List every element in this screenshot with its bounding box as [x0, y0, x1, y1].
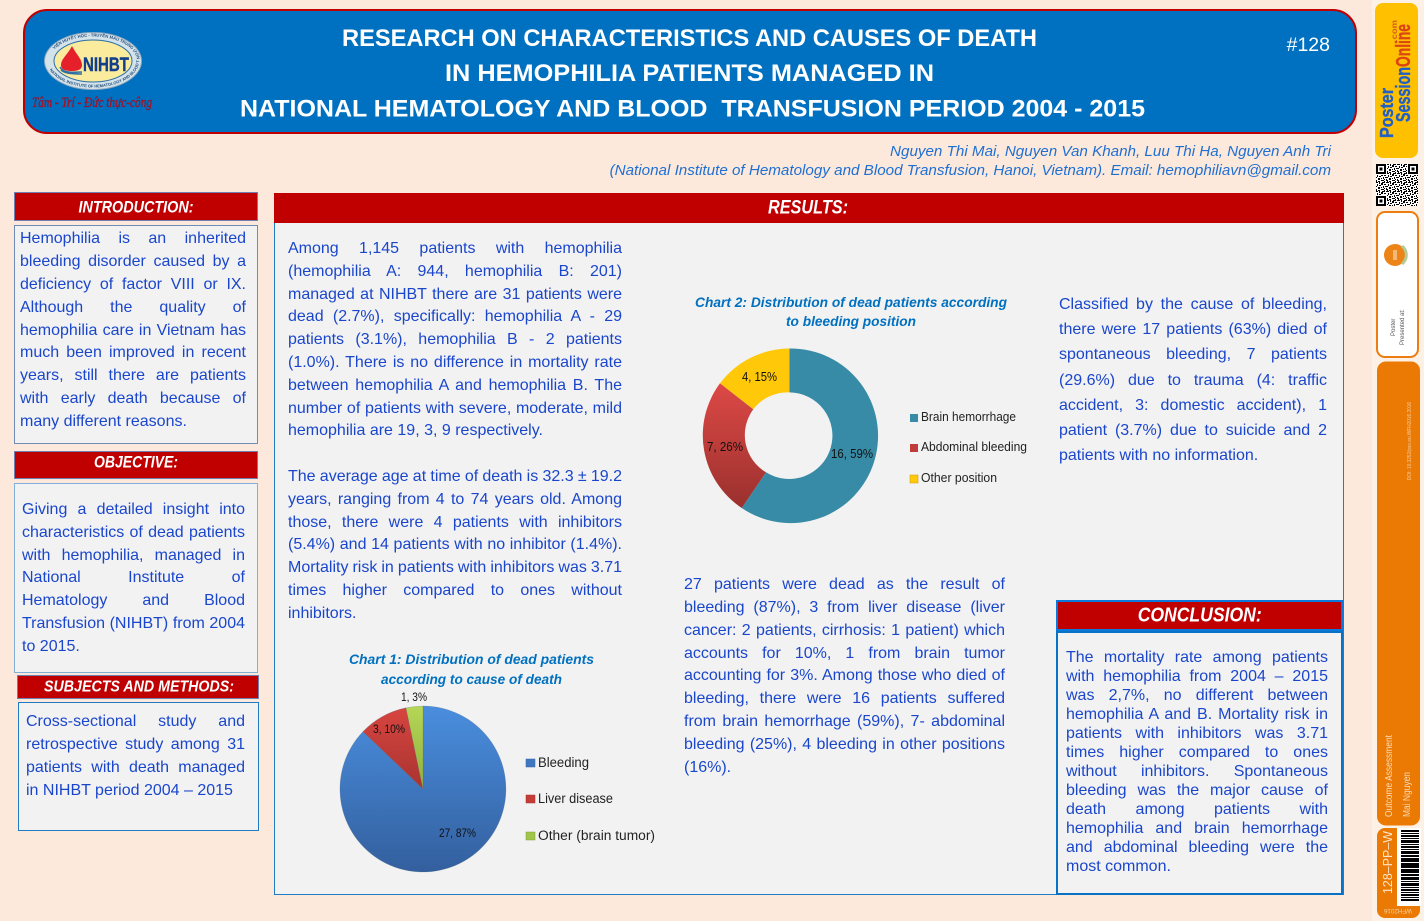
- text: introduction: Although the quality of: [20, 299, 246, 316]
- text: results column 1: between hemophilia A and hemophilia B. The: [288, 377, 622, 394]
- icon: congress logo: [1384, 244, 1406, 266]
- text: results column 3: there were 17 patients (63%) died of: [1059, 321, 1327, 338]
- sidebar: orange info bar: Mai Nguyen: [1402, 772, 1413, 817]
- donut legend: Brain hemorrhage: [921, 409, 1016, 424]
- text: subjects and methods: [26, 713, 245, 799]
- heading: results: [274, 193, 1344, 223]
- text: conclusion: hemophilia A and B. Mortality risk in: [1066, 706, 1328, 723]
- title: [240, 25, 1145, 122]
- text: conclusion: death among patients with: [1066, 801, 1328, 818]
- text: introduction: with early death because of: [20, 390, 246, 407]
- text: results column 2: bleeding (25%), 4 bleeding in other positions: [684, 736, 1005, 753]
- text: introduction: bleeding disorder caused by a: [20, 253, 246, 270]
- heading: objective: [14, 451, 258, 479]
- text: objective: with hemophilia, managed in: [22, 547, 245, 564]
- icon: NIHBT logo: NIHBT: [83, 55, 129, 76]
- text: subjects and methods: patients with death managed: [26, 759, 245, 776]
- heading: introduction: [14, 192, 258, 221]
- text: results column 1: years, ranging from 4 to 74 years old. Among: [288, 491, 622, 508]
- pie legend: Bleeding: [538, 755, 589, 770]
- icon: QR code: [1376, 164, 1418, 206]
- text: introduction: hemophilia care in Vietnam has: [20, 322, 246, 339]
- sidebar: presented at card: Presented at:: [1400, 309, 1406, 345]
- panel: objective: [14, 483, 258, 673]
- pie data labels: [373, 692, 476, 840]
- text: results column 1: number of patients with severe, moderate, mild: [288, 400, 622, 417]
- text: conclusion: bleeding was the major cause of: [1066, 782, 1328, 799]
- icon: NIHBT logo: Tâm - Trí - Đức thực-công: [32, 95, 152, 111]
- text: results column 2: accounts for 10%, 1 from brain tumor: [684, 645, 1005, 662]
- text: results column 1: dead (2.7%), specifically: hemophilia A - 29: [288, 308, 622, 325]
- icon: barcode: [1401, 830, 1419, 901]
- text: subjects and methods: retrospective study among 31: [26, 736, 245, 753]
- chart 1 title: [349, 651, 594, 687]
- panel: conclusion: [1056, 631, 1343, 895]
- text: results column 2: [684, 576, 1005, 776]
- donut legend: [910, 409, 1027, 485]
- text: conclusion: with hemophilia from 2004 – 2015: [1066, 668, 1328, 685]
- text: results column 1: (hemophilia A: 944, hemophilia B: 201): [288, 263, 622, 280]
- pie legend: [526, 755, 655, 843]
- chart 2: donut chart of bleeding position: [695, 294, 1027, 524]
- pie data labels: 3, 10%: [373, 724, 405, 736]
- heading: objective: OBJECTIVE:: [94, 454, 178, 472]
- text: results column 2: (16%).: [684, 759, 731, 776]
- pie data labels: 27, 87%: [439, 828, 476, 840]
- text: objective: Transfusion (NIHBT) from 2004: [22, 615, 245, 632]
- sidebar: orange info bar: DOI: 10.3252/pso.eu.WFH2016.2016: [1407, 402, 1413, 480]
- text: objective: [22, 501, 245, 655]
- text: conclusion: and abdominal bleeding were the: [1066, 839, 1328, 856]
- sidebar: orange info bar: [1377, 362, 1420, 826]
- chart 2 title: [695, 294, 1007, 329]
- text: conclusion: without inhibitors. Spontaneous: [1066, 763, 1328, 780]
- sidebar: presented at card: Poster: [1391, 319, 1397, 336]
- sidebar: orange info bar: Outcome Assessment: [1384, 735, 1395, 817]
- heading: subjects and methods: [17, 675, 259, 699]
- text: results column 1: times higher compared to ones without: [288, 582, 622, 599]
- donut data labels: 16, 59%: [831, 447, 873, 461]
- text: introduction: deficiency of factor VIII or IX.: [20, 276, 246, 293]
- text: results column 1: (5.4%) and 14 patients with no inhibitor (1.4%).: [288, 536, 622, 553]
- heading: conclusion: CONCLUSION:: [1138, 605, 1262, 627]
- sidebar: poster session online logo: Poster: [1377, 88, 1397, 138]
- sidebar: barcode tag: WFH2016: [1384, 907, 1412, 914]
- text: results column 1: patients (3.1%), hemophilia B - 2 patients: [288, 331, 622, 348]
- donut data labels: [707, 370, 873, 461]
- poster number: #128: [1287, 34, 1330, 56]
- sidebar: poster session online logo: Session: [1393, 67, 1415, 122]
- donut data labels: 7, 26%: [707, 440, 743, 454]
- text: introduction: years, still there are patients: [20, 367, 246, 384]
- authors: [610, 142, 1332, 179]
- text: conclusion: was 2,7%, no different between: [1066, 687, 1328, 704]
- authors: (National Institute of Hematology and Blood Transfusion, Hanoi, Vietnam). Email: hemophiliavn@gmail.com: [610, 162, 1331, 179]
- text: objective: National Institute of: [22, 569, 245, 586]
- pie data labels: 1, 3%: [401, 692, 427, 704]
- text: results column 2: 27 patients were dead as the result of: [684, 576, 1005, 593]
- text: subjects and methods: Cross-sectional study and: [26, 713, 245, 730]
- text: results column 3: patients with no information.: [1059, 447, 1258, 464]
- title: NATIONAL HEMATOLOGY AND BLOOD TRANSFUSION PERIOD 2004 - 2015: [240, 96, 1145, 122]
- text: introduction: much been improved in recent: [20, 344, 246, 361]
- donut data labels: 4, 15%: [742, 370, 777, 384]
- text: results column 1: (1.0%). There is no difference in mortality rate: [288, 354, 622, 371]
- text: objective: characteristics of dead patients: [22, 524, 245, 541]
- text: subjects and methods: in NIHBT period 2004 – 2015: [26, 782, 233, 799]
- title: RESEARCH ON CHARACTERISTICS AND CAUSES OF DEATH: [342, 25, 1037, 52]
- text: results column 1: hemophilia are 19, 3, 9 respectively.: [288, 422, 543, 439]
- text: results column 3: [1059, 296, 1327, 464]
- heading: introduction: INTRODUCTION:: [78, 198, 194, 216]
- sidebar: presented at card: [1376, 211, 1419, 358]
- chart 2 title: to bleeding position: [786, 313, 916, 329]
- donut slices: [703, 348, 878, 523]
- panel: introduction: [14, 225, 258, 444]
- sidebar: poster session online logo: .com: [1390, 20, 1399, 42]
- text: results column 1: Among 1,145 patients with hemophilia: [288, 240, 622, 257]
- text: conclusion: most common.: [1066, 858, 1171, 875]
- text: results column 2: cancer: 2 patients, cirrhosis: 1 patient) which: [684, 622, 1005, 639]
- chart 1 title: according to cause of death: [381, 671, 562, 687]
- heading: subjects and methods: SUBJECTS AND METHODS:: [44, 678, 234, 696]
- text: results column 2: bleeding (87%), 3 from liver disease (liver: [684, 599, 1005, 616]
- sidebar: poster session online logo: [1375, 3, 1418, 158]
- text: objective: Hematology and Blood: [22, 592, 245, 609]
- text: conclusion: patients with inhibitors was 3.71: [1066, 725, 1328, 742]
- text: results column 1: [288, 240, 622, 622]
- donut legend: Abdominal bleeding: [921, 439, 1027, 454]
- pie slices: [340, 706, 506, 872]
- sidebar: poster session online logo: Online: [1393, 24, 1415, 67]
- text: results column 1: The average age at time of death is 32.3 ± 19.2: [288, 468, 622, 485]
- text: conclusion: hemophilia and brain hemorrhage: [1066, 820, 1328, 837]
- text: introduction: many different reasons.: [20, 413, 187, 430]
- text: objective: Giving a detailed insight into: [22, 501, 245, 518]
- text: results column 2: accounting for 3%. Among those who died of: [684, 667, 1005, 684]
- sidebar: barcode tag: 128–PP–W: [1380, 830, 1395, 894]
- text: conclusion: [1066, 648, 1328, 875]
- sidebar: barcode tag: [1377, 828, 1421, 918]
- pie legend: Other (brain tumor): [538, 828, 655, 843]
- text: results column 1: managed at NIHBT there are 31 patients were: [288, 286, 622, 303]
- text: results column 3: accident, 3: domestic accident), 1: [1059, 397, 1327, 414]
- text: results column 3: spontaneous bleeding, 7 patients: [1059, 346, 1327, 363]
- authors: Nguyen Thi Mai, Nguyen Van Khanh, Luu Thi Ha, Nguyen Anh Tri: [890, 142, 1331, 160]
- heading: conclusion: [1056, 600, 1343, 631]
- chart 1 title: Chart 1: Distribution of dead patients: [349, 651, 594, 667]
- donut legend: Other position: [921, 470, 997, 485]
- text: results column 2: from brain hemorrhage (59%), 7- abdominal: [684, 713, 1005, 730]
- heading: results: RESULTS:: [768, 196, 848, 218]
- header banner: [23, 9, 1357, 134]
- text: results column 1: those, there were 4 patients with inhibitors: [288, 514, 622, 531]
- text: results column 2: bleeding, there were 16 patients suffered: [684, 690, 1005, 707]
- pie legend: Liver disease: [538, 791, 613, 806]
- side strip background: [1372, 0, 1424, 921]
- chart 1: pie chart of cause of death: [340, 651, 655, 872]
- title: IN HEMOPHILIA PATIENTS MANAGED IN: [445, 60, 934, 87]
- text: results column 3: Classified by the cause of bleeding,: [1059, 296, 1327, 313]
- panel: subjects and methods: [18, 702, 259, 831]
- text: results column 3: (29.6%) due to trauma (4: traffic: [1059, 372, 1327, 389]
- text: introduction: [20, 230, 246, 430]
- text: results column 1: Mortality risk in patients with inhibitors was 3.71: [288, 559, 622, 576]
- text: conclusion: The mortality rate among patients: [1066, 648, 1328, 666]
- chart 2 title: Chart 2: Distribution of dead patients according: [695, 294, 1007, 310]
- text: introduction: Hemophilia is an inherited: [20, 230, 246, 247]
- text: conclusion: times higher compared to ones: [1066, 744, 1328, 761]
- panel: results: [274, 222, 1344, 895]
- text: objective: to 2015.: [22, 638, 80, 655]
- icon: NIHBT logo: [32, 32, 152, 111]
- text: results column 1: inhibitors.: [288, 605, 356, 622]
- text: results column 3: patient (3.7%) due to suicide and 2: [1059, 422, 1327, 439]
